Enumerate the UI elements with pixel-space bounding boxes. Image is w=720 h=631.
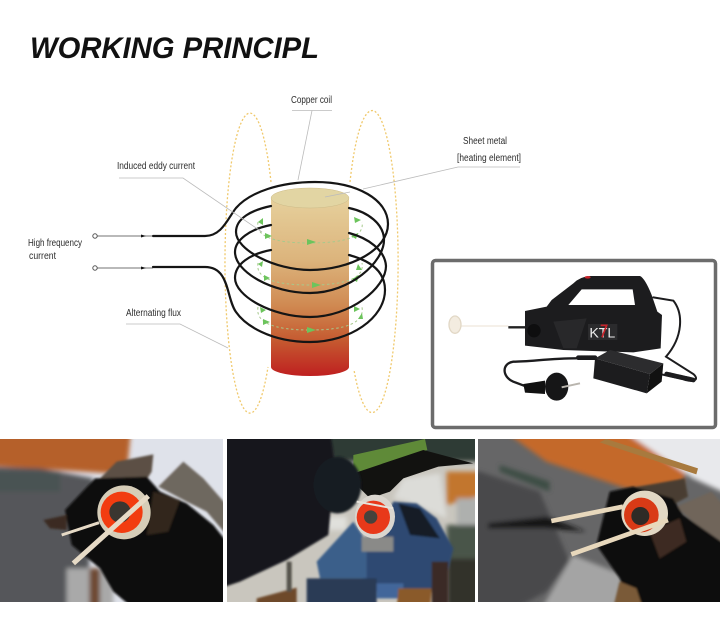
heated coil [355, 495, 395, 539]
heated metal cylinder [271, 188, 349, 376]
blurred background [0, 422, 132, 615]
photo 2: coil on blue vice [227, 439, 475, 602]
terminal lead lower [93, 266, 153, 270]
blue vice [257, 502, 453, 608]
terminal lead upper [93, 234, 153, 238]
diagram: induction heating [28, 95, 521, 413]
vice [596, 478, 720, 608]
photo 3: coil leads toward handle [478, 439, 720, 602]
blurred background [320, 428, 483, 615]
label: alternating flux [126, 308, 228, 348]
label: induced eddy current [117, 161, 262, 232]
label: copper coil [291, 95, 332, 180]
title: WORKING PRINCIPL [30, 32, 319, 65]
mains plug [523, 373, 580, 401]
shelf edge [600, 439, 698, 474]
label: copper coil: Copper coil [291, 95, 332, 106]
machine underside [357, 450, 473, 498]
label: induced eddy current: Induced eddy current [117, 161, 195, 172]
label: sheet metal [325, 136, 521, 197]
heater body [525, 276, 662, 352]
label: sheet metal: [heating element] [457, 153, 521, 164]
eddy arrows [258, 217, 363, 333]
panel: product photo [432, 260, 716, 428]
brand logo: KTL [589, 325, 616, 341]
copper coil [153, 182, 388, 342]
flux field right [350, 111, 398, 413]
label: high frequency current [28, 238, 82, 262]
work coil [449, 316, 527, 333]
label: sheet metal: Sheet metal [463, 136, 507, 147]
product: induction heater and adapter [449, 276, 696, 401]
power adapter [593, 350, 663, 393]
eddy currents [258, 222, 362, 330]
power cables [505, 297, 696, 387]
heated coil [551, 491, 668, 554]
label: high frequency current: High frequency [28, 238, 82, 249]
heated coil [62, 485, 151, 563]
label: high frequency current: current [29, 251, 56, 262]
label: alternating flux: Alternating flux [126, 308, 181, 319]
photo 1: coil glowing in vice [0, 439, 223, 602]
green machine arm [353, 439, 427, 472]
black grip [220, 432, 361, 588]
vice jaws [43, 454, 227, 608]
blurred background [470, 422, 720, 612]
flux field left [225, 113, 271, 413]
